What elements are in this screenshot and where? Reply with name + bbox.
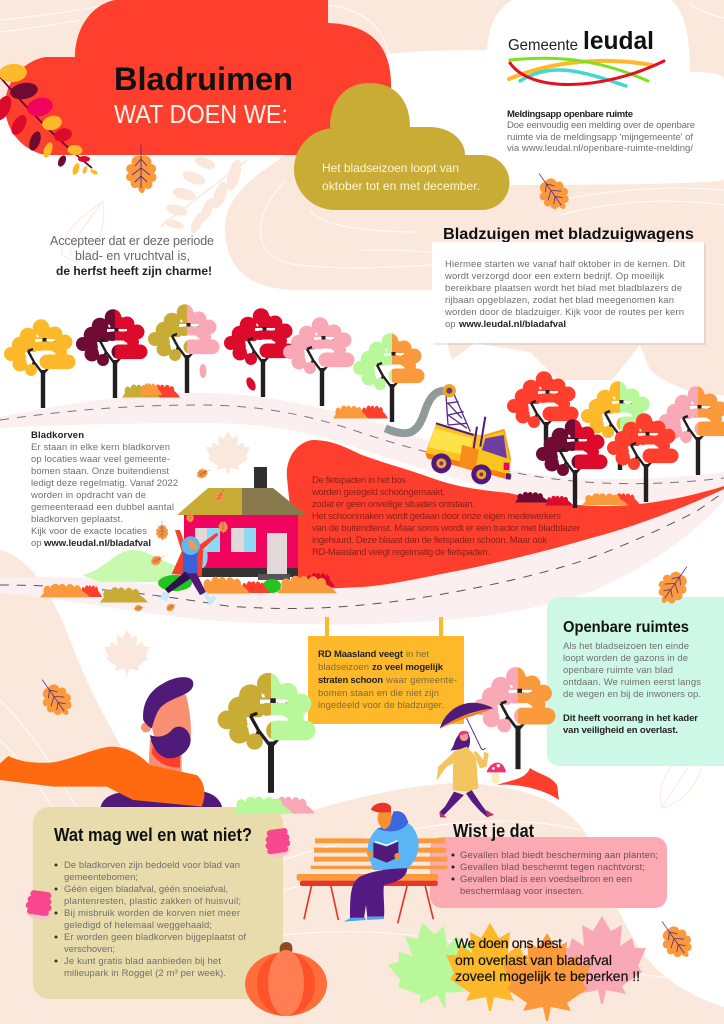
panel: bladzuigen: op bbox=[445, 319, 456, 330]
background: faint leaf outline bbox=[62, 201, 104, 262]
sign: RD Maasland: bladseizoen bbox=[318, 662, 369, 673]
background: peach top-right shape bbox=[225, 0, 724, 395]
bushes at house bbox=[200, 573, 337, 594]
panel: wat mag wel en wat niet: Je kunt gratis blad aanbieden bij het bbox=[64, 956, 221, 967]
background: peach fern leaf bbox=[160, 155, 247, 235]
red hill text: De fietspaden in het bos bbox=[312, 475, 406, 486]
panel: wat mag wel en wat niet: milieupark in Roggel (2 m³ per week). bbox=[64, 968, 226, 979]
sign: RD Maasland: in het bbox=[406, 649, 429, 660]
dark green lawn bbox=[158, 575, 192, 591]
panel: wat mag wel en wat niet: gemeentebomen; bbox=[64, 872, 138, 883]
tree: crimson bbox=[224, 308, 296, 397]
logo bbox=[508, 27, 664, 86]
panel: wist je dat: Gevallen blad beschermt tegen nachtvorst; bbox=[460, 862, 645, 873]
app notice text: via www.leudal.nl/openbare-ruimte-melding/ bbox=[507, 143, 693, 154]
app notice text bbox=[507, 109, 695, 154]
tree: pink and orange bbox=[659, 386, 724, 475]
text: bladkorven: bladkorven geplaatst. bbox=[31, 514, 123, 525]
red hill bbox=[287, 440, 724, 590]
season text bbox=[322, 161, 480, 193]
icon: oak leaf right bbox=[528, 166, 575, 217]
text: bladkorven: bomen staan. Onze buitendienst bbox=[31, 466, 169, 477]
heading: wist je dat: Wist je dat bbox=[453, 821, 534, 841]
red hill text: Het schoonmaken wordt gedaan door onze eigen medewerkers bbox=[312, 511, 561, 522]
season text: oktober tot en met december. bbox=[322, 179, 480, 193]
small orange leaves bbox=[134, 466, 228, 613]
big tree bbox=[218, 673, 316, 793]
sign: RD Maasland: waar gemeente- bbox=[385, 675, 457, 686]
tree: pink orange by woman bbox=[473, 667, 555, 769]
season text: Het bladseizoen loopt van bbox=[322, 161, 459, 175]
sign: RD Maasland: RD Maasland veegt bbox=[318, 649, 404, 660]
tree: maroon crimson front bbox=[536, 419, 608, 508]
text: bladkorven: Er staan in elke kern bladkorven bbox=[31, 442, 170, 453]
small falling leaves bbox=[200, 364, 258, 392]
acceptance text: Accepteer dat er deze periode bbox=[50, 234, 214, 248]
text: bladkorven: gemeenteraad een dubbel aantal bbox=[31, 502, 174, 513]
panel: openbare ruimtes: van veiligheid en overlast. bbox=[563, 725, 678, 736]
panel: wat mag wel en wat niet: Bij misbruik worden de korven niet meer bbox=[64, 908, 240, 919]
text: bladkorven: worden in opdracht van de bbox=[30, 490, 146, 501]
bush under big tree bbox=[232, 797, 315, 814]
panel: wist je dat bbox=[430, 837, 667, 908]
bushes on path left bbox=[40, 584, 148, 602]
panel: wat mag wel en wat niet: plantenresten, plastic zakken of huisvuil; bbox=[64, 896, 241, 907]
panel: wat mag wel en wat niet: verschoven; bbox=[64, 944, 115, 955]
subtitle: WAT DOEN WE: bbox=[114, 99, 288, 129]
sign: RD Maasland bbox=[308, 617, 464, 724]
tree: red back bbox=[507, 371, 578, 460]
mitten right bbox=[263, 827, 292, 859]
acceptance text: de herfst heeft zijn charme! bbox=[56, 264, 212, 278]
panel: openbare ruimtes: Openbare ruimtes bbox=[563, 619, 689, 636]
icon: oak leaf left bbox=[31, 672, 78, 723]
acceptance text bbox=[50, 234, 214, 278]
panel: wist je dat: Gevallen blad is een voedselbron en een bbox=[460, 874, 632, 885]
app notice text: Doe eenvoudig een melding over de openbare bbox=[507, 120, 695, 131]
text: bladkorven: Bladkorven bbox=[31, 430, 84, 441]
red title cloud bbox=[5, 0, 391, 155]
woman with umbrella and mushroom bbox=[437, 703, 506, 817]
house bbox=[177, 467, 306, 593]
icon: oak leaf top bbox=[126, 145, 156, 193]
tree: yellow and green bbox=[581, 381, 652, 470]
text: bladkorven: www.leudal.nl/bladafval bbox=[43, 538, 151, 549]
panel: openbare ruimtes: de wegen en bij de inwoners op. bbox=[563, 689, 701, 700]
app notice text: Meldingsapp openbare ruimte bbox=[507, 109, 633, 120]
maple leaves closing message bbox=[380, 911, 646, 1021]
panel: bladzuigen: www.leudal.nl/bladafval bbox=[458, 319, 566, 330]
red hill text: zodat er geen onveilige situaties ontstaan. bbox=[312, 499, 475, 510]
sign: RD Maasland: straten schoon bbox=[318, 675, 383, 686]
text: bladkorven: op bbox=[31, 538, 42, 549]
panel: openbare ruimtes: Als het bladseizoen ten einde bbox=[563, 641, 689, 652]
red hill text bbox=[311, 475, 580, 558]
title: Bladruimen bbox=[114, 61, 293, 97]
panel: openbare ruimtes bbox=[547, 597, 724, 766]
red hill text: ingehuurd. Deze blaast dan de fietspaden schoon. Maar ook bbox=[312, 535, 547, 546]
pumpkin bbox=[245, 942, 327, 1016]
panel: bladzuigen: worden door de bladzuiger. Kijk voor de routes per kern bbox=[444, 307, 684, 318]
tree: red front bbox=[607, 413, 678, 502]
background: faint leaf outline right bbox=[660, 742, 705, 808]
panel: openbare ruimtes: Dit heeft voorrang in het kader bbox=[563, 713, 698, 724]
logo: leudal bbox=[583, 27, 654, 55]
panel: wat mag wel en wat niet: Géén eigen bladafval, géén snoeiafval, bbox=[64, 884, 228, 895]
heading: bladzuigen: Bladzuigen met bladzuigwagens bbox=[443, 226, 694, 243]
man with beard and scarf bbox=[0, 677, 223, 810]
red hill text: RD-Maasland veegt regelmatig de fietspaden. bbox=[312, 547, 490, 558]
icon: oak leaf mid right bbox=[651, 559, 698, 610]
bush: orange right bbox=[582, 493, 640, 505]
road: lower dashes bbox=[0, 492, 724, 609]
panel: bladzuigen: bereikbare plaatsen wordt het blad met bladblazers de bbox=[445, 283, 682, 294]
panel: bladzuigen: rijbaan opgeblazen, zodat het blad meegenomen kan bbox=[445, 295, 674, 306]
panel: wat mag wel en wat niet: De bladkorven zijn bedoeld voor blad van bbox=[64, 860, 240, 871]
background: white cloud behind logo bbox=[380, 0, 724, 185]
green hill behind house bbox=[82, 550, 190, 582]
panel: bladzuigen: wordt verzorgd door een extern bedrijf. Op moeilijk bbox=[444, 271, 664, 282]
text: bladkorven: ledigt deze regelmatig. Vanaf 2022 bbox=[31, 478, 178, 489]
bench with reading person bbox=[297, 803, 447, 923]
closing message: zoveel mogelijk te beperken !! bbox=[455, 968, 640, 984]
sign: RD Maasland: ingedeeld voor de bladzuiger. bbox=[318, 700, 444, 711]
leaf vacuum truck bbox=[385, 384, 512, 484]
text: bladkorven: op locaties waar veel gemeente- bbox=[31, 454, 170, 465]
background: peach maple leaves bbox=[104, 431, 250, 676]
road: lower path bbox=[0, 487, 724, 625]
background: peach lower hill bbox=[0, 550, 724, 1024]
panel: wat mag wel en wat niet: Wat mag wel en wat niet? bbox=[54, 825, 252, 845]
road: upper dashes bbox=[0, 405, 724, 484]
panel: wat mag wel en wat niet: Er worden geen bladkorven bijgeplaatst of bbox=[64, 932, 246, 943]
app notice text: ruimte via de meldingsapp 'mijngemeente' of bbox=[507, 132, 693, 143]
text: bladkorven bbox=[30, 430, 178, 549]
panel: wat mag wel en wat niet: geledigd of helemaal weggehaald; bbox=[64, 920, 212, 931]
bush: gold-red top bbox=[122, 383, 180, 398]
mitten left bbox=[24, 889, 54, 921]
tree: pink bbox=[283, 317, 354, 406]
text: bladkorven: Kijk voor de exacte locaties bbox=[31, 526, 147, 537]
red leaf mound bbox=[497, 768, 559, 800]
panel: openbare ruimtes: loopt worden de gazons in de bbox=[563, 653, 688, 664]
panel: bladzuigen bbox=[432, 242, 706, 345]
closing message: om overlast van bladafval bbox=[455, 952, 612, 968]
icon: oak leaf bottom right bbox=[651, 914, 698, 965]
panel: bladzuigen: Hiermee starten we vanaf half oktober in de kernen. Dit bbox=[445, 259, 685, 270]
panel: openbare ruimtes: openbare ruimte van blad bbox=[563, 665, 673, 676]
background: lower wave lines bbox=[0, 700, 724, 985]
running person bbox=[152, 530, 218, 606]
bush: maroon crimson bbox=[515, 492, 573, 506]
tree: yellow bbox=[4, 319, 76, 408]
acceptance text: blad- en vruchtval is, bbox=[75, 249, 190, 263]
red hill text: van de buitendienst. Maar soms wordt er een tractor met bladblazer bbox=[312, 523, 580, 534]
tree: maroon and crimson bbox=[76, 309, 148, 398]
bush: orange-red upper bbox=[333, 406, 388, 418]
background: white wave lines bbox=[0, 5, 724, 268]
closing message: We doen ons best bbox=[455, 935, 562, 951]
logo: Gemeente bbox=[508, 37, 578, 54]
road: upper path bbox=[0, 393, 724, 506]
tree: green and orange bbox=[353, 333, 424, 422]
red hill text: worden geregeld schoongemaakt, bbox=[311, 487, 445, 498]
panel: wat mag wel en wat niet bbox=[33, 807, 283, 999]
tree: gold and pink bbox=[148, 304, 220, 393]
branch with leaves bbox=[0, 63, 98, 176]
sign: RD Maasland: bomen staan en die niet zijn bbox=[318, 688, 439, 699]
gold season cloud bbox=[294, 83, 510, 210]
sign: RD Maasland: zo veel mogelijk bbox=[372, 662, 444, 673]
closing message bbox=[455, 935, 640, 984]
panel: wist je dat: beschermlaag voor insecten. bbox=[460, 886, 584, 897]
panel: openbare ruimtes: ontdaan. We ruimen eerst langs bbox=[563, 677, 701, 688]
background: peach top-left shape bbox=[0, 0, 130, 100]
panel: wist je dat: Gevallen blad biedt bescherming aan planten; bbox=[460, 850, 658, 861]
